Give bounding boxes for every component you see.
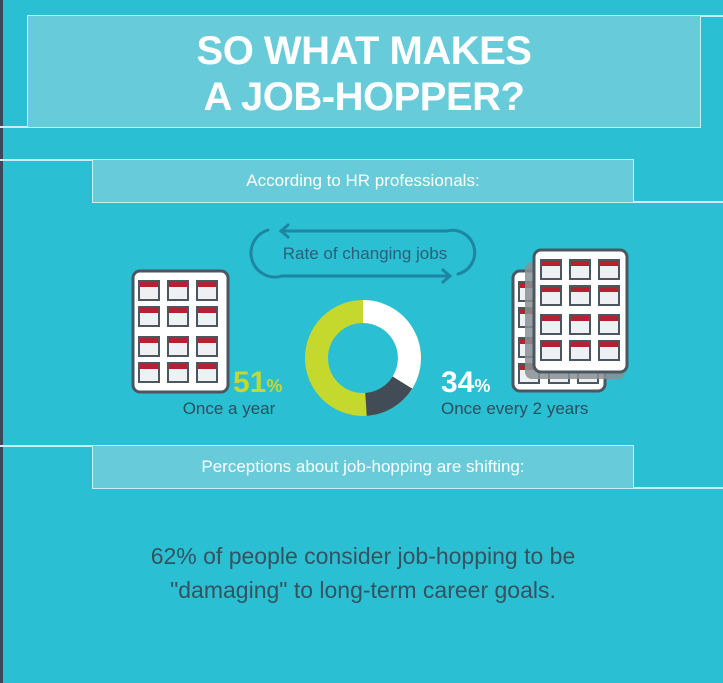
- subheading: perceptions: [92, 445, 634, 489]
- title panel: [27, 15, 701, 128]
- subheading: according to HR: According to HR professionals:: [246, 171, 480, 190]
- statement: 62%: [151, 543, 575, 603]
- arrow: rate of changing jobs: [251, 225, 475, 282]
- stat: 51%: Once a year: [183, 399, 276, 418]
- statement: 62%: 62% of people consider job-hopping to be: [151, 543, 575, 569]
- stat: 51%: 51%: [233, 366, 282, 399]
- title panel: SO WHAT MAKES: [197, 29, 531, 73]
- icon: calendar sheet left: [133, 271, 228, 392]
- arrow: rate of changing jobs: Rate of changing jobs: [283, 244, 447, 263]
- subheading: according to HR: [92, 159, 634, 203]
- title panel: A JOB-HOPPER?: [204, 75, 524, 119]
- stat: 34%: Once every 2 years: [441, 399, 588, 418]
- subheading: perceptions: Perceptions about job-hopping are shifting:: [201, 457, 525, 476]
- stat: 34%: 34%: [441, 366, 490, 399]
- icon: calendar sheets right: [513, 250, 627, 391]
- donut chart: [316, 312, 410, 404]
- stat: 34%: [441, 366, 588, 418]
- stat: 51%: [183, 366, 282, 418]
- statement: 62%: "damaging" to long-term career goals.: [170, 577, 556, 603]
